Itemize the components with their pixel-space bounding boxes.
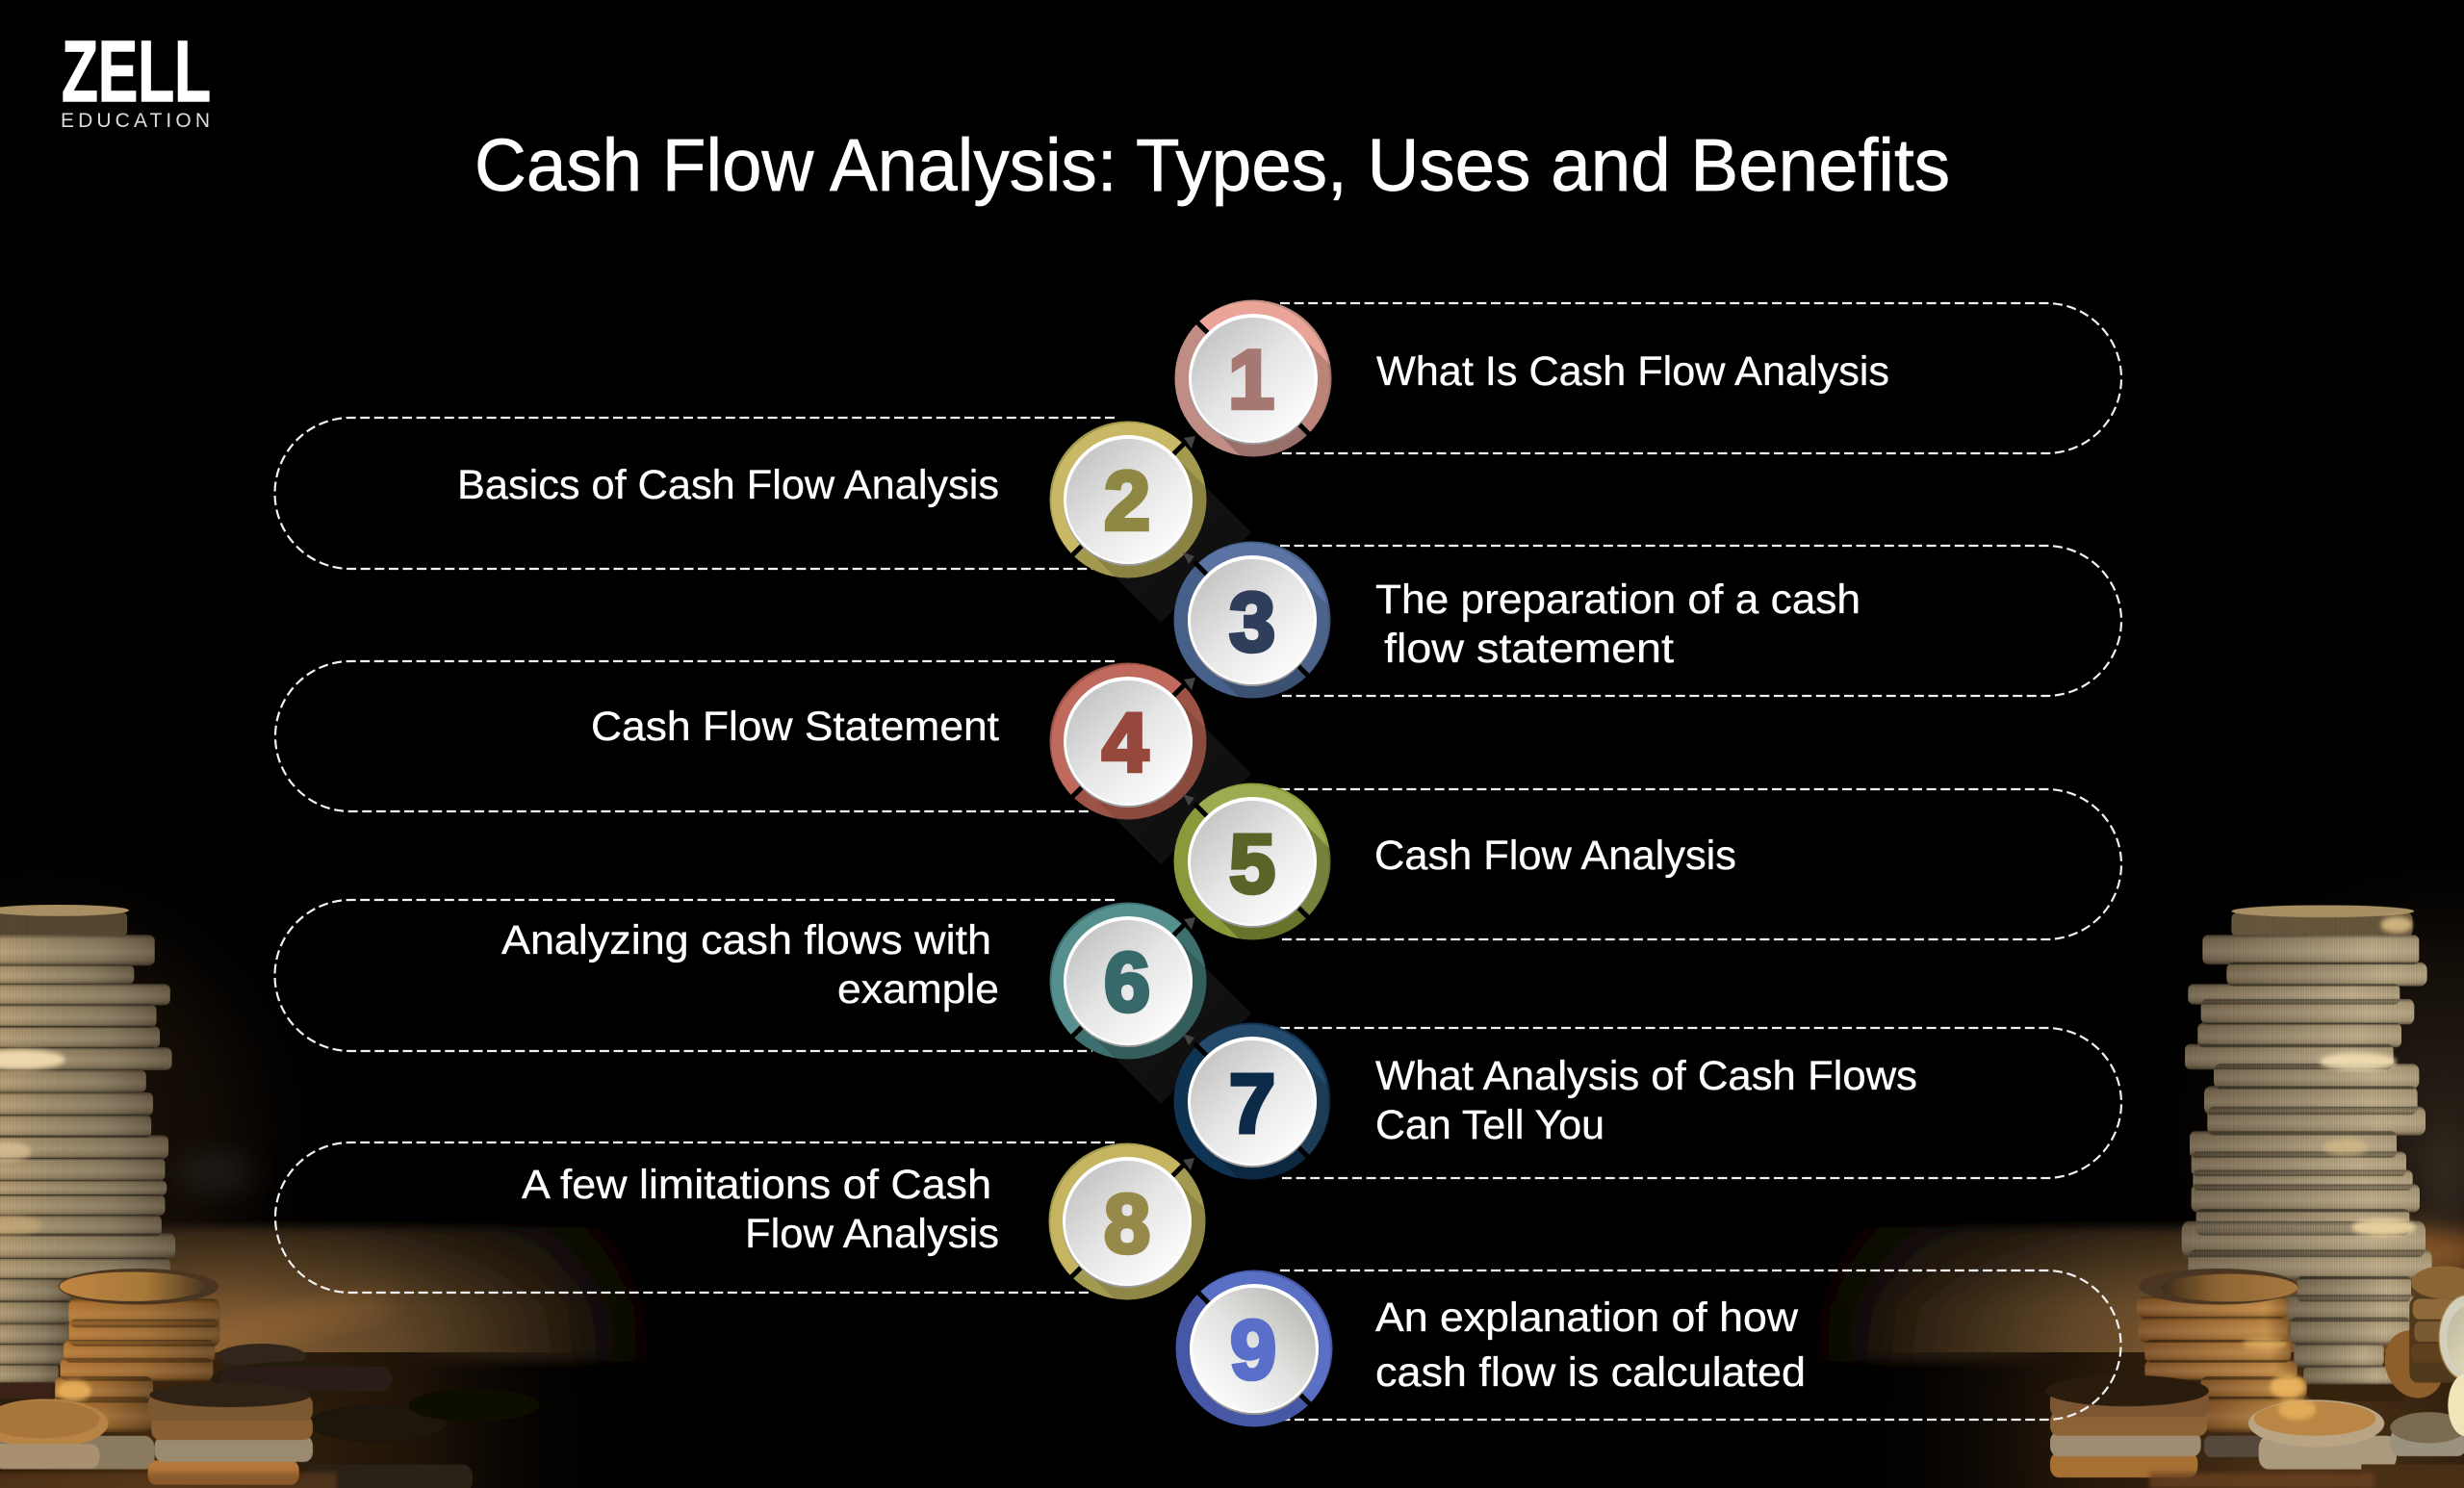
number badge 3 — [1174, 541, 1330, 699]
label 6 — [501, 917, 999, 1013]
right coin cluster — [2375, 1266, 2464, 1436]
bottom coins — [0, 1344, 540, 1488]
number badge 7 — [1174, 1022, 1330, 1180]
coin stacks right — [2045, 905, 2464, 1488]
dashed pill 8 — [275, 1142, 1115, 1293]
title: Cash Flow Analysis: Types, Uses and Benefits — [475, 124, 1950, 207]
number badge 4 — [1049, 662, 1207, 820]
dashed pill 4 — [275, 661, 1115, 811]
number badge 7: 7 — [1229, 1058, 1275, 1150]
logo: ZELL — [62, 24, 211, 120]
number badge 5: 5 — [1229, 818, 1275, 911]
bottom coins — [2045, 1375, 2464, 1488]
label 6: example — [837, 966, 999, 1013]
number badge 2 — [1049, 422, 1207, 577]
coin stacks left — [0, 905, 540, 1488]
dashed pill 1 — [1280, 303, 2121, 453]
dashed pill 6 — [275, 900, 1115, 1051]
label 4: Cash Flow Statement — [591, 704, 999, 750]
label 5: Cash Flow Analysis — [1374, 833, 1736, 879]
number badge 3: 3 — [1229, 577, 1275, 669]
label 3: The preparation of a cash — [1375, 577, 1861, 623]
label 6: Analyzing cash flows with — [501, 917, 991, 963]
label 7: Can Tell You — [1375, 1102, 1604, 1148]
label 7 — [1375, 1053, 1917, 1148]
tall silver-tan stack — [2182, 935, 2432, 1401]
label 8 — [522, 1162, 999, 1257]
copper stack — [50, 1269, 220, 1432]
number badge 4: 4 — [1102, 697, 1148, 789]
label 8: A few limitations of Cash — [522, 1162, 991, 1208]
dashed pill 2 — [275, 418, 1115, 569]
number badge 5 — [1174, 783, 1330, 939]
label 1: What Is Cash Flow Analysis — [1376, 348, 1889, 395]
background: warm table glow — [0, 828, 2464, 1488]
number badge 2: 2 — [1104, 455, 1150, 548]
dashed pill 5 — [1280, 789, 2121, 939]
label 9: cash flow is calculated — [1375, 1349, 1806, 1396]
label 3 — [1375, 577, 1861, 672]
number badge 6: 6 — [1104, 936, 1150, 1029]
label 8: Flow Analysis — [745, 1211, 999, 1257]
label 9 — [1375, 1295, 1806, 1396]
number badge 9: 9 — [1230, 1304, 1276, 1397]
dashed pill 3 — [1280, 546, 2121, 696]
number badge 8: 8 — [1104, 1178, 1150, 1270]
label 7: What Analysis of Cash Flows — [1375, 1053, 1917, 1099]
connector shadows — [1083, 454, 1251, 1104]
label 3: flow statement — [1384, 626, 1674, 672]
dashed pill 7 — [1280, 1028, 2121, 1178]
top coin — [0, 905, 129, 936]
top coin — [2231, 905, 2414, 936]
number badge 1: 1 — [1228, 334, 1274, 426]
dashed pill 9 — [1280, 1270, 2121, 1420]
label 2: Basics of Cash Flow Analysis — [457, 462, 999, 508]
logo — [61, 24, 211, 132]
number badge 9 — [1176, 1270, 1332, 1426]
tall silver-tan stack — [0, 935, 175, 1398]
number badge 8 — [1049, 1143, 1205, 1299]
label 9: An explanation of how — [1375, 1295, 1799, 1341]
logo: EDUCATION — [61, 110, 210, 132]
number badge 1 — [1174, 300, 1332, 456]
copper stack — [2137, 1269, 2307, 1432]
number badge 6 — [1049, 903, 1207, 1059]
